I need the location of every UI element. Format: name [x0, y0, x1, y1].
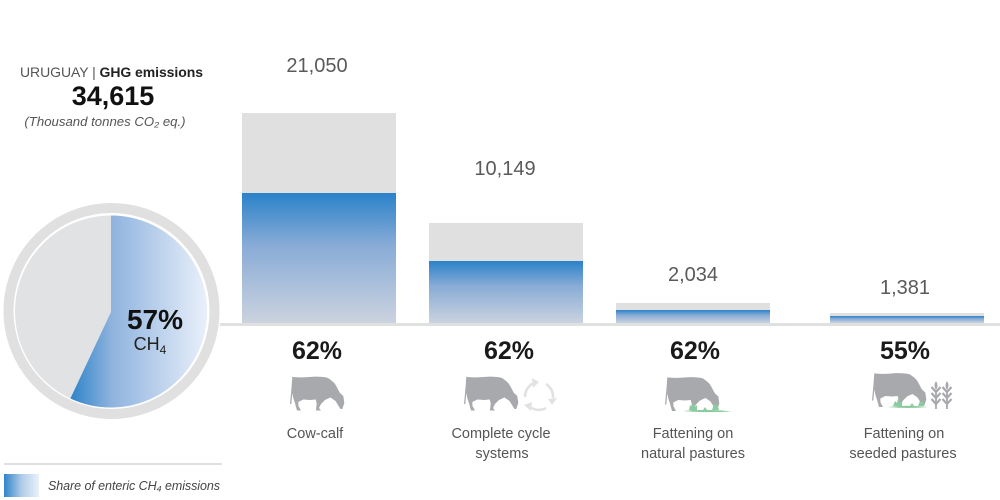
- category: complete cycle systems: systems: [475, 446, 529, 462]
- bar: fattening on natural pastures: 2,034: [668, 264, 718, 286]
- baseline axis: [220, 323, 1000, 326]
- category: fattening on natural pastures: natural pastures: [641, 446, 745, 462]
- pie chart: 57% CH4 share: 57%: [127, 304, 183, 335]
- category: fattening on seeded pastures: seeded pastures: [849, 446, 957, 462]
- category: complete cycle systems: Complete cycle: [451, 426, 551, 442]
- bar: fattening on seeded pastures: [830, 277, 984, 323]
- legend: share of enteric CH4: [4, 463, 222, 497]
- pie chart: 57% CH4 share: CH: [134, 334, 160, 354]
- category: fattening on natural pastures: Fattening on: [653, 426, 733, 442]
- category: fattening on natural pastures: 62%: [670, 337, 720, 365]
- category: fattening on seeded pastures: 55%: [880, 337, 930, 365]
- heading: total GHG emissions: (Thousand tonnes CO₂ eq.): [24, 114, 186, 129]
- icon: wheat: [932, 381, 952, 409]
- heading: total GHG emissions: URUGUAY | GHG emissions: [20, 64, 203, 80]
- category: cow-calf: 62%: [292, 337, 342, 365]
- bar: fattening on natural pastures: [616, 264, 770, 323]
- bar: cow-calf: 21,050: [286, 55, 348, 77]
- icon: grass: [683, 402, 732, 412]
- heading: total GHG emissions: 34,615: [72, 81, 154, 111]
- legend: share of enteric CH4: Share of enteric CH₄ emissions: [48, 479, 220, 493]
- icon: recycle arrows: [524, 378, 557, 411]
- category: complete cycle systems: 62%: [484, 337, 534, 365]
- category: fattening on seeded pastures: [849, 337, 957, 462]
- bar: complete cycle systems: 10,149: [474, 158, 536, 180]
- bar: cow-calf: [242, 55, 396, 323]
- category: fattening on seeded pastures: Fattening on: [864, 426, 944, 442]
- category: complete cycle systems: [451, 337, 557, 462]
- bar: fattening on seeded pastures: 1,381: [880, 277, 930, 299]
- category: cow-calf: Cow-calf: [287, 426, 344, 442]
- category: fattening on natural pastures: [641, 337, 745, 462]
- category: cow-calf: [287, 337, 344, 442]
- bar: complete cycle systems: [429, 158, 583, 323]
- heading: total GHG emissions: [20, 64, 203, 129]
- pie chart: 57% CH4 share: 4: [160, 343, 167, 357]
- icon: grass: [888, 398, 928, 408]
- pie chart: 57% CH4 share: [8, 208, 214, 414]
